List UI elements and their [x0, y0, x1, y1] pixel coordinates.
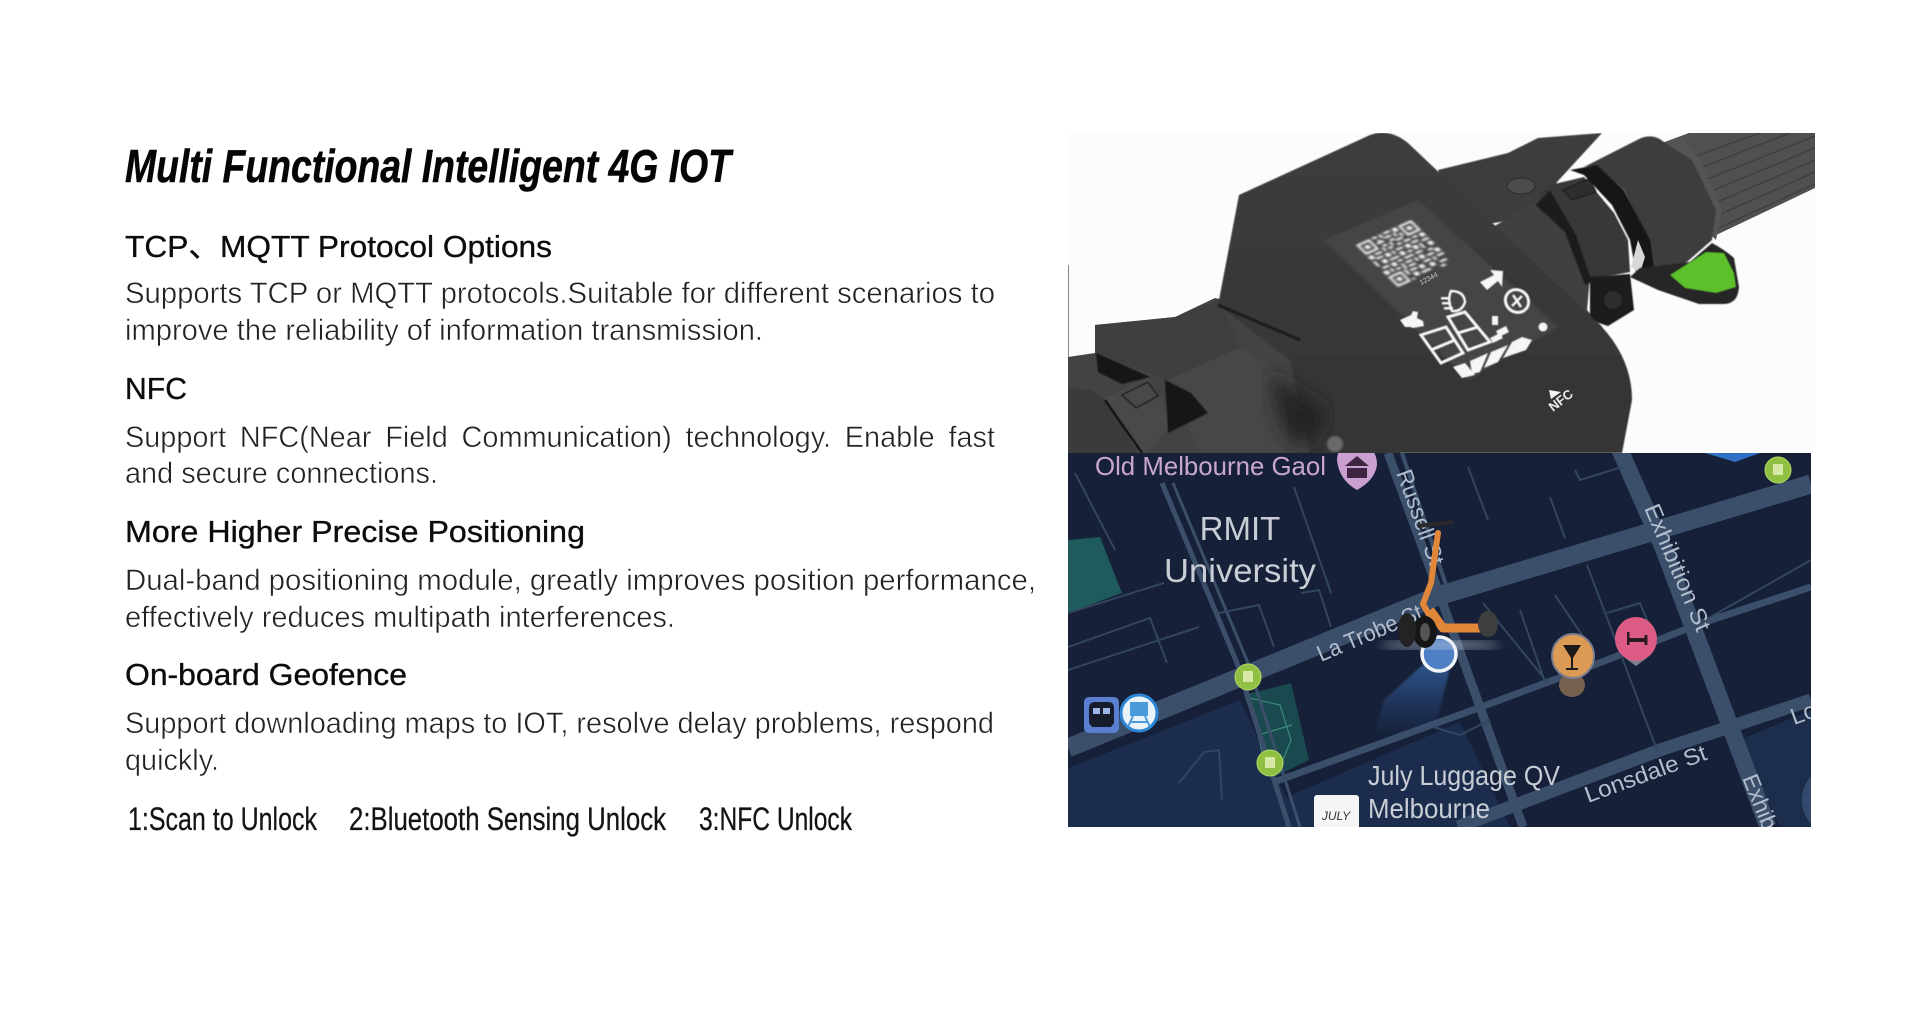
label: RMIT University: [1164, 510, 1317, 589]
left grip collar: [1068, 378, 1208, 453]
heading: NFC: NFC: [125, 371, 187, 406]
logo: JULY: JULY: [1321, 809, 1351, 823]
throttle collar: [1584, 136, 1716, 270]
body: TCP MQTT: Supports TCP or MQTT protocols.Suitable for different scenarios to: [125, 277, 995, 310]
handlebar tube: [1494, 214, 1602, 328]
pin: hotel: [1615, 617, 1657, 666]
label: July Luggage QV Melbourne: July Luggage QV: [1368, 760, 1560, 791]
body: geofence: Support downloading maps to IOT, resolve delay problems, respond: [125, 707, 994, 740]
speed digits 88: [1421, 312, 1490, 363]
body: geofence: [125, 707, 994, 777]
black pad: [1096, 353, 1150, 384]
QR code: [1356, 220, 1453, 287]
heading: geofence: On-board Geofence: [125, 657, 407, 692]
pin: tram stops: [1235, 457, 1791, 776]
street labels: Russell St: [1391, 466, 1450, 569]
bluetooth ring: [1503, 287, 1531, 315]
section: positioning: [125, 514, 1036, 634]
throttle trigger surround: [1630, 243, 1739, 304]
street labels: La Trobe St: [1313, 599, 1427, 667]
body: TCP MQTT: improve the reliability of information transmission.: [125, 314, 763, 347]
icon: train station: [1084, 697, 1119, 733]
brake lever: [1438, 133, 1602, 230]
left body: [1068, 298, 1400, 453]
NFC mark: [1548, 390, 1572, 412]
body: NFC: Support NFC(Near Field Communication) technology. Enable fast: [125, 421, 996, 454]
serial number: 12344: [1419, 272, 1439, 287]
map panel: [1068, 445, 1850, 833]
headlight: [1449, 291, 1465, 311]
unlock methods row: 3:NFC Unlock: [699, 801, 853, 837]
clamp section: [1536, 177, 1630, 285]
label: RMIT University: RMIT: [1200, 510, 1280, 547]
logo: JULY: [1314, 795, 1359, 829]
street labels: Lo: [1787, 697, 1820, 730]
green block: [1068, 537, 1122, 613]
plate shadow: [1268, 373, 1328, 447]
body: geofence: quickly.: [125, 744, 219, 777]
body: positioning: effectively reduces multipath interferences.: [125, 601, 675, 634]
green throttle: [1670, 252, 1736, 293]
section: TCP MQTT protocol options: [125, 229, 995, 347]
corner circle: [1802, 777, 1811, 824]
body: positioning: Dual-band positioning module, greatly improves position performance,: [125, 564, 1036, 597]
black band: [1570, 165, 1654, 272]
scooter: [1380, 522, 1500, 649]
mount bolt: [1590, 274, 1634, 326]
photo: scooter handlebar display: [1068, 133, 1815, 453]
grip: [1662, 133, 1815, 240]
body: NFC: and secure connections.: [125, 457, 438, 490]
blue blob: [1705, 453, 1760, 462]
heading: TCP MQTT: TCP、MQTT Protocol Options: [125, 229, 552, 264]
pin: museum: [1337, 445, 1377, 490]
white sliver: [1631, 240, 1645, 273]
section: geofence: [125, 657, 994, 777]
screen window: [1324, 200, 1558, 380]
unlock methods row: 2:Bluetooth Sensing Unlock: [349, 801, 667, 837]
LCD icons: [1400, 270, 1548, 378]
location beam: [1377, 664, 1452, 729]
display plate: [1218, 133, 1632, 453]
park: [1244, 683, 1309, 777]
street labels: Exhib: [1737, 770, 1783, 833]
title: Multi Functional Intelligent 4G IOT: [125, 140, 734, 192]
lower-left lighter blocks: [1068, 700, 1510, 827]
label: July Luggage QV Melbourne: [1368, 760, 1560, 824]
street labels: [1313, 466, 1820, 833]
mount screw: [1327, 436, 1343, 452]
dot: [1538, 322, 1548, 332]
street labels: Exhibition St: [1639, 500, 1717, 636]
status marks: [1490, 316, 1509, 343]
label: Old Melbourne Gaol: Old Melbourne Gaol: [1095, 451, 1326, 481]
unlock methods row: [128, 801, 853, 837]
pin: bar: [1552, 634, 1594, 697]
roads: [1068, 450, 1811, 827]
heading: positioning: More Higher Precise Positioning: [125, 514, 585, 549]
body: positioning: [125, 564, 1036, 634]
battery bars: [1453, 337, 1532, 378]
NFC mark: NFC: [1546, 386, 1576, 414]
arrow left: [1400, 311, 1424, 328]
button: [1507, 178, 1535, 194]
arrow right: [1480, 270, 1503, 290]
icon: metro: [1121, 695, 1157, 731]
body: TCP MQTT: [125, 277, 995, 347]
label: July Luggage QV Melbourne: Melbourne: [1368, 793, 1490, 824]
section: NFC: [125, 371, 996, 490]
street labels: Lonsdale St: [1581, 739, 1711, 808]
unlock methods row: 1:Scan to Unlock: [128, 801, 318, 837]
location marker: [1422, 637, 1456, 671]
body: NFC: [125, 421, 996, 490]
label: RMIT University: University: [1164, 552, 1317, 589]
